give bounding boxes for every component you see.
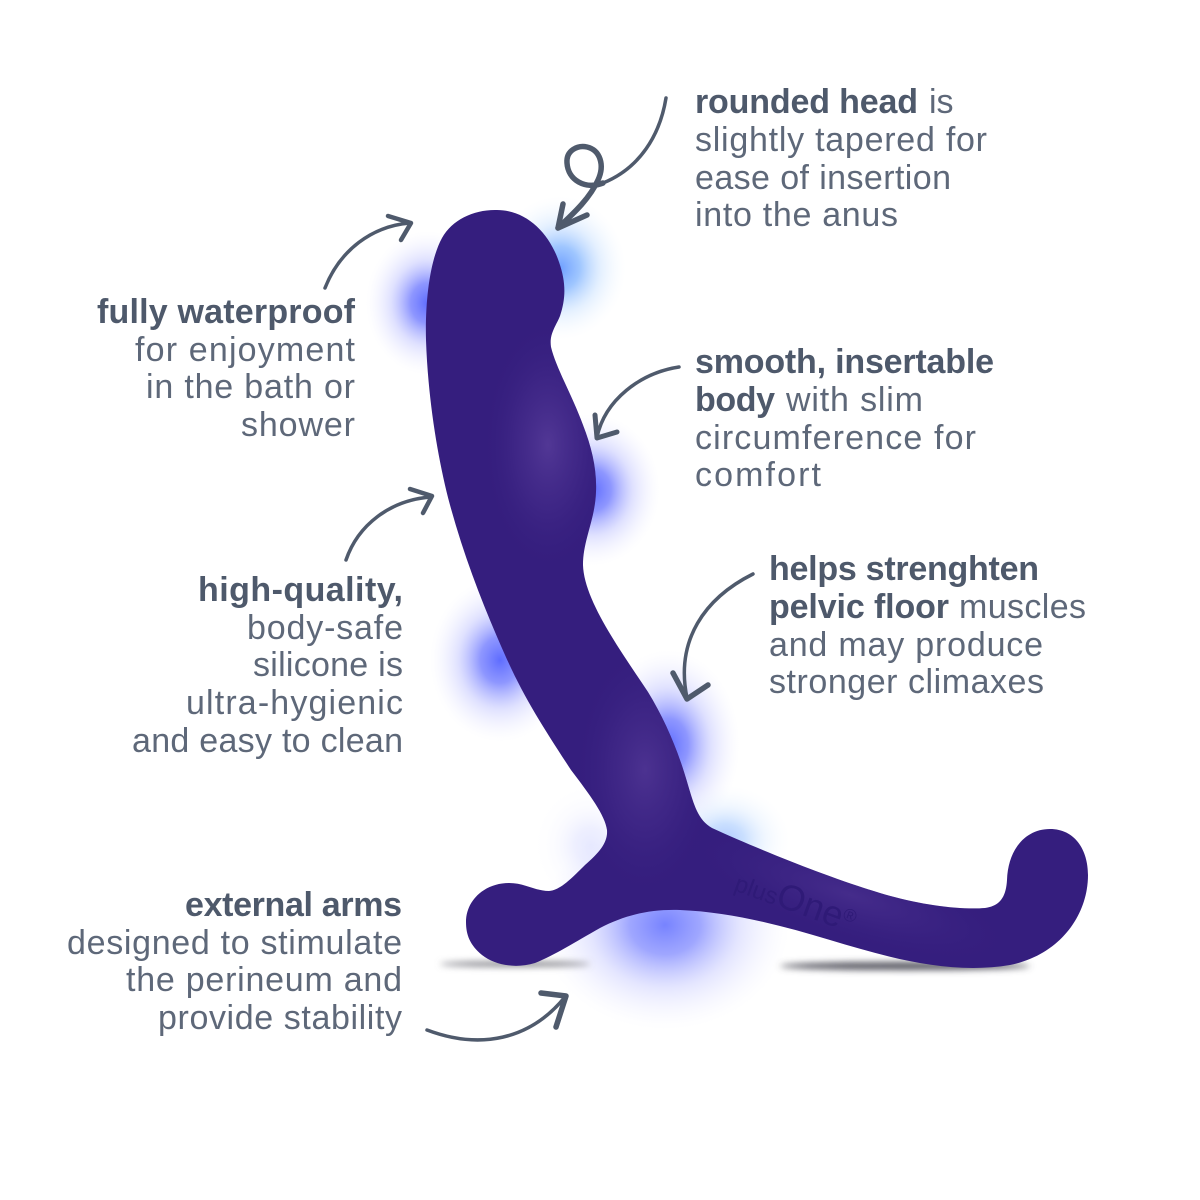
product body bbox=[426, 210, 1088, 968]
glow: body spot bbox=[524, 414, 660, 566]
text: smooth body: circumference for bbox=[695, 419, 976, 457]
highlight: right arm bbox=[768, 852, 938, 918]
text: rounded head: into the anus bbox=[695, 196, 898, 234]
glow: inner arm spot bbox=[535, 785, 645, 905]
shadow: right arm bbox=[780, 962, 1030, 970]
highlight: mid body bbox=[514, 344, 594, 512]
arrow: waterproof bbox=[325, 216, 411, 288]
text: pelvic floor: helps strenghten bbox=[769, 550, 1039, 588]
glow: pelvic floor spot bbox=[596, 650, 740, 840]
text: rounded head bbox=[695, 83, 987, 234]
highlight: lower body bbox=[596, 676, 694, 830]
text: high-quality: body-safe bbox=[247, 609, 403, 647]
text: pelvic floor bbox=[769, 550, 1086, 701]
text: external arms: designed to stimulate bbox=[67, 924, 402, 962]
text: smooth body: smooth, insertable bbox=[695, 343, 994, 381]
glow: arms spot bbox=[540, 820, 790, 1030]
text: smooth body: body bbox=[695, 381, 775, 419]
text: smooth body: with slim bbox=[785, 381, 923, 419]
text: rounded head: slightly tapered for bbox=[695, 121, 987, 159]
text: rounded head: ease of insertion bbox=[695, 159, 951, 197]
glow: head spot bbox=[494, 196, 626, 340]
arrow: high-quality bbox=[346, 489, 432, 560]
text: rounded head: rounded head bbox=[695, 83, 918, 121]
text: pelvic floor: muscles bbox=[959, 588, 1086, 626]
arrow: external arms bbox=[427, 993, 566, 1040]
logo: plusOne bbox=[731, 870, 850, 936]
text: pelvic floor: stronger climaxes bbox=[769, 663, 1044, 701]
text: smooth body bbox=[695, 343, 994, 494]
glow: waterproof spot bbox=[366, 231, 490, 375]
text: high-quality: ultra-hygienic bbox=[186, 684, 403, 722]
text: fully waterproof: for enjoyment bbox=[135, 331, 356, 369]
text: external arms: external arms bbox=[185, 886, 402, 924]
text: smooth body: comfort bbox=[695, 456, 822, 494]
text: external arms bbox=[67, 886, 402, 1037]
logo: ® bbox=[840, 904, 860, 927]
text: high-quality: high-quality, bbox=[198, 571, 403, 609]
text: rounded head: is bbox=[929, 83, 954, 121]
arrow: rounded head bbox=[558, 98, 666, 228]
text: high-quality bbox=[132, 571, 403, 760]
arrow: smooth body bbox=[595, 367, 679, 438]
shadow: left arm bbox=[440, 962, 590, 966]
text: high-quality: silicone is bbox=[253, 646, 403, 684]
text: pelvic floor: and may produce bbox=[769, 626, 1043, 664]
text: pelvic floor: pelvic floor bbox=[769, 588, 949, 626]
text: fully waterproof: in the bath or bbox=[146, 368, 355, 406]
text: high-quality: and easy to clean bbox=[132, 722, 403, 760]
text: fully waterproof: fully waterproof bbox=[97, 293, 356, 331]
glow: silicone spot bbox=[430, 578, 570, 742]
text: fully waterproof: shower bbox=[241, 406, 355, 444]
glow: base light spot bbox=[660, 785, 790, 895]
text: fully waterproof bbox=[97, 293, 356, 444]
text: external arms: provide stability bbox=[158, 999, 402, 1037]
arrow: pelvic floor bbox=[673, 574, 753, 699]
text: external arms: the perineum and bbox=[126, 961, 402, 999]
